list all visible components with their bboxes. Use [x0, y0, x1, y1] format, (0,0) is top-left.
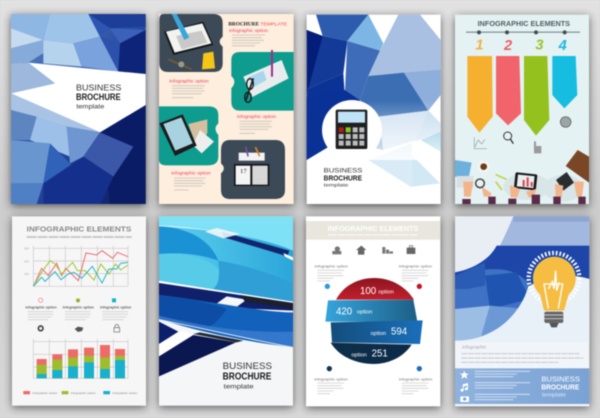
- marker dots: [325, 284, 422, 371]
- circle segment: 594: [331, 320, 423, 344]
- body text lines: [461, 354, 583, 362]
- option labels: infographic option: [171, 171, 211, 176]
- heading: INFOGRAPHIC ELEMENTS: [27, 225, 131, 234]
- body text lines: [28, 312, 128, 320]
- step numbers: 3: [535, 37, 543, 53]
- circle segment: 251: option: [351, 352, 367, 358]
- panel: peach infographic brochure: [159, 14, 294, 204]
- option labels: infographic option: [314, 376, 348, 381]
- chart legend: infographic option: [71, 391, 96, 395]
- cover title: template: [324, 183, 349, 189]
- line chart: 300: [24, 247, 29, 251]
- panel: blue waves brochure cover: [159, 216, 293, 406]
- card: open magazine: [231, 50, 294, 111]
- chart legend: [23, 391, 138, 395]
- heading: INFOGRAPHIC ELEMENTS: [478, 19, 570, 28]
- cover title: BUSINESS: [324, 168, 363, 175]
- cover title: BUSINESS: [223, 361, 272, 371]
- panel: ribbons infographic: [455, 15, 589, 204]
- icon: magnifier: [504, 132, 513, 144]
- card: calendar: 17: [240, 168, 247, 175]
- circle segment: 594: 594: [391, 327, 408, 338]
- body heading: infographic: [462, 344, 487, 350]
- step numbers: 1: [475, 37, 483, 53]
- panel: circular ribbon infographic: [306, 216, 440, 406]
- option labels: infographic option: [100, 305, 131, 309]
- heading: BROCHURE: [228, 22, 260, 27]
- ribbon 4: [552, 56, 577, 108]
- option labels: infographic option: [399, 376, 432, 381]
- circle segment: 251: 251: [372, 349, 388, 360]
- panel: chart infographic: [12, 216, 146, 406]
- chart legend: infographic option: [32, 391, 58, 395]
- cover title: [324, 168, 363, 189]
- option labels: [25, 305, 131, 309]
- circle segment: 594: option: [371, 331, 386, 337]
- body text lines: [317, 270, 428, 394]
- cover title: BROCHURE: [223, 372, 272, 383]
- desk illustration: [455, 150, 589, 204]
- icon: hand pointer: [534, 141, 541, 153]
- option labels: infographic option: [25, 305, 57, 309]
- icon: light bulb: [529, 253, 579, 327]
- legend markers: [39, 298, 116, 302]
- quadrant: bottom right brochures: [306, 216, 589, 408]
- option labels: [169, 28, 276, 176]
- quadrant: top left brochures: [11, 14, 294, 206]
- option labels: [314, 264, 432, 381]
- step numbers: 2: [503, 38, 512, 54]
- timeline: [466, 30, 580, 34]
- line chart: 200: [24, 259, 29, 263]
- line chart: [24, 246, 128, 286]
- cover title: BROCHURE: [324, 173, 362, 182]
- card: tablet: [159, 106, 218, 165]
- cover title: template: [224, 383, 254, 390]
- panel: blue polygon brochure cover: [11, 14, 146, 204]
- ribbon 2: [496, 56, 521, 125]
- heading band: INFOGRAPHIC ELEMENTS: [328, 226, 419, 233]
- icons: gear, handshake, lock: [38, 325, 120, 332]
- icon: chart: [474, 137, 487, 149]
- heading band: [306, 221, 440, 240]
- option labels: infographic option: [229, 28, 268, 33]
- footer band: BUSINESS: [541, 375, 580, 384]
- heading: [228, 21, 287, 27]
- body text lines: [172, 35, 272, 190]
- option labels: infographic option: [315, 264, 348, 269]
- cover title: [223, 361, 272, 390]
- circle segment: 100: [336, 278, 414, 300]
- card: calendar: [221, 140, 285, 199]
- circle segment: 251: [331, 343, 412, 364]
- quadrant: top right brochures: [307, 15, 589, 207]
- ribbon 1: [467, 56, 493, 133]
- cover title: BUSINESS: [76, 82, 122, 92]
- bar chart: [33, 339, 128, 378]
- option labels: infographic option: [237, 114, 276, 119]
- step numbers: 4: [558, 38, 567, 54]
- circle segment: 100: 100: [360, 286, 376, 297]
- circle segment: 100: option: [378, 290, 394, 296]
- top icons: [332, 246, 415, 255]
- quadrant: bottom left brochures: [12, 216, 293, 408]
- cover title: BROCHURE: [76, 92, 121, 102]
- white arrow banner: [11, 63, 146, 132]
- footer band: template: [542, 393, 566, 399]
- circle segment: 420: [325, 300, 417, 322]
- panel: light bulb brochure: [455, 216, 589, 406]
- chart legend: infographic option: [112, 391, 138, 395]
- step numbers: [475, 37, 567, 54]
- option labels: infographic option: [169, 78, 209, 83]
- option labels: infographic option: [63, 305, 94, 309]
- icon: globe: [560, 117, 571, 127]
- footer band: [455, 368, 589, 404]
- calculator icon: [322, 100, 382, 160]
- cover title: [76, 82, 122, 110]
- option labels: infographic option: [399, 264, 432, 269]
- panel: calculator brochure cover: [307, 15, 441, 204]
- cover title: template: [76, 103, 105, 110]
- circle segment: 420: 420: [336, 306, 352, 317]
- circle segment: 420: option: [357, 310, 372, 316]
- footer band: BROCHURE: [541, 383, 579, 392]
- heading: TEMPLATE: [260, 21, 287, 26]
- ribbon 3: [524, 56, 549, 136]
- card: clipboard: [159, 14, 223, 72]
- line chart: 100: [24, 272, 29, 276]
